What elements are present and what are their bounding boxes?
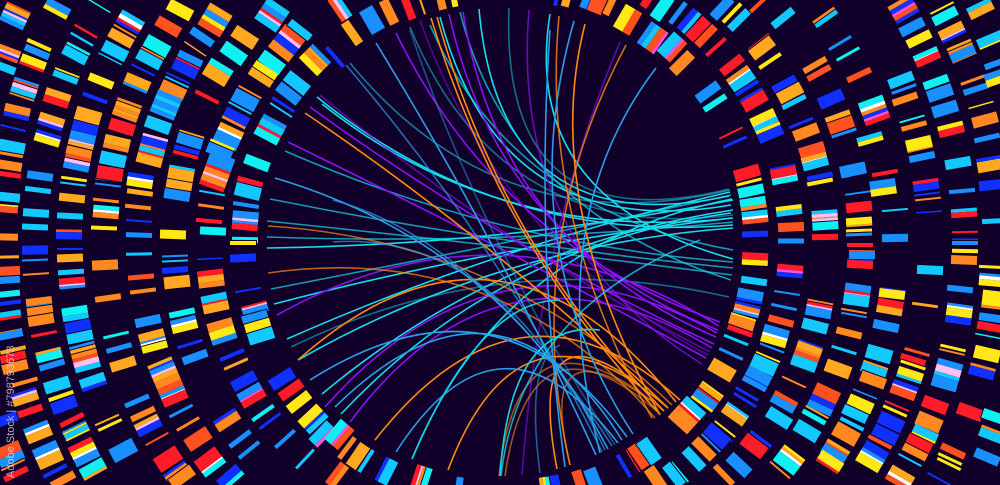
data blocks: top-left quadrant [0,0,331,243]
chord bundle: purple lines [277,10,720,475]
chord bundle: orange lines [268,16,680,476]
data blocks: bottom-right quadrant [662,241,1000,485]
data blocks: bottom-left quadrant [0,241,336,485]
chord bundle: cyan lines to bottom [412,240,700,476]
chord bundle: cyan lines to right [267,8,733,459]
stock credit text: Adobe Stock | #798793673 [5,345,17,478]
data blocks: top-right quadrant [657,0,1000,244]
data blocks: inner ring top and bottom [324,0,674,485]
chord bundle: blue lines [275,21,656,473]
